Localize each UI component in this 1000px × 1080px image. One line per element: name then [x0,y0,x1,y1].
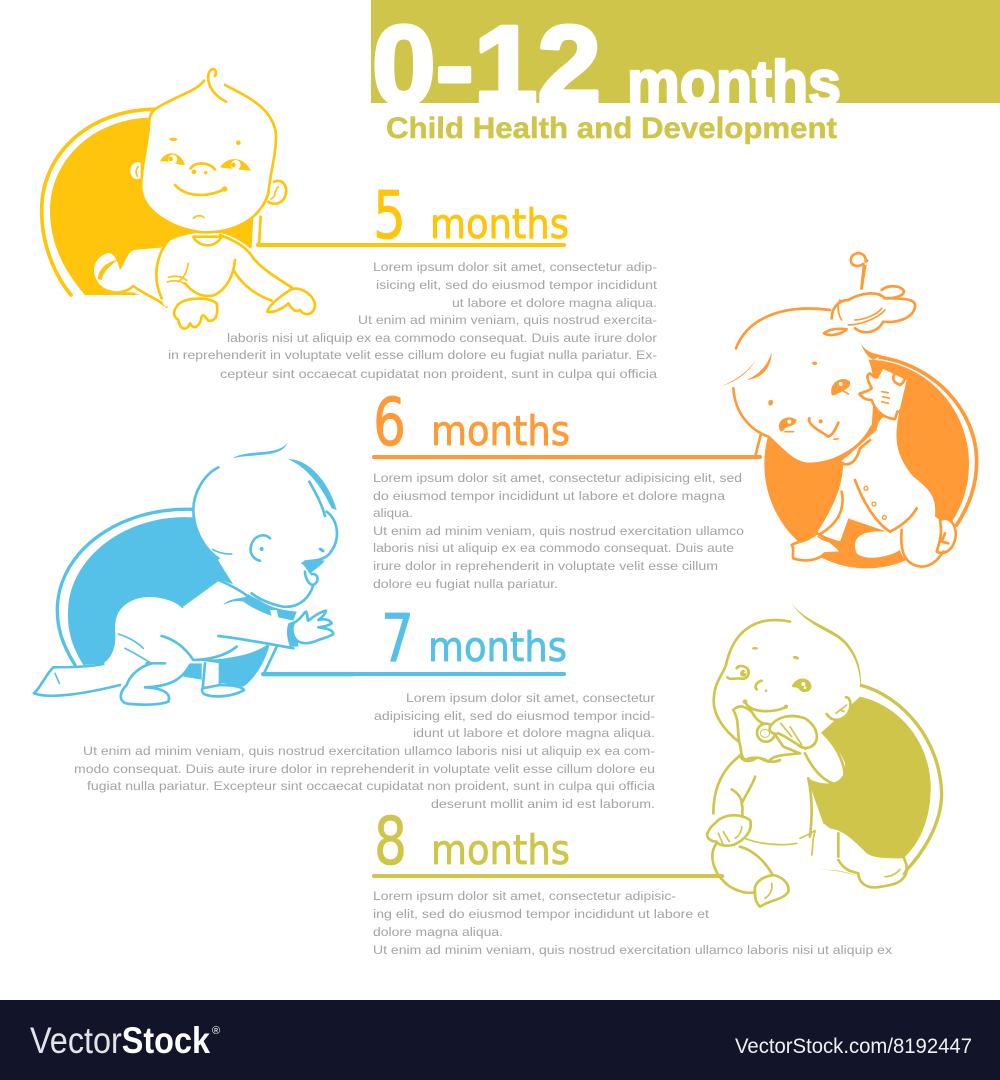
body text: ut labore et dolore magna aliqua. [452,296,657,310]
title: 0-12 months: months [627,49,841,118]
body text: do eiusmod tempor incididunt ut labore et dolore magna [373,489,725,503]
body text: modo consequat. Duis aute irure dolor in reprehenderit in voluptate velit esse cillum dolore eu [74,762,655,776]
body text: adipisicing elit, sed do eiusmod tempor incid- [374,709,655,723]
heading: 8 months [374,803,570,880]
body text: laboris nisi ut aliquip ex ea commodo consequat. Duis aute [373,541,734,555]
heading: 7 months [381,600,567,677]
body text: Ut enim ad minim veniam, quis nostrud exercitation ullamco laboris nisi ut aliquip ex ea com- [83,744,655,758]
body text: in reprehenderit in voluptate velit esse cillum dolore eu fugiat nulla pariatur. Ex- [168,348,657,362]
body text [373,471,744,591]
heading: 8 months: 8 [374,803,407,880]
body text: Ut enim ad minim veniam, quis nostrud exercitation ullamco laboris nisi ut aliquip ex [373,943,893,957]
body text: cepteur sint occaecat cupidatat non proident, sunt in culpa qui officia [220,367,657,381]
connector line [263,672,564,676]
registered mark: ® [212,1025,220,1037]
body text: dolore eu fugiat nulla pariatur. [373,577,558,591]
footer image id: VectorStock.com/8192447 [735,1035,972,1058]
body text: deserunt mollit anim id est laborum. [431,797,655,811]
body text [373,889,893,957]
section: 5 months [168,177,658,381]
subtitle: Child Health and Development [386,112,837,145]
body text: Lorem ipsum dolor sit amet, consectetur adipisic- [373,889,676,903]
heading: 6 months: 6 [373,384,406,461]
title: 0-12 months [372,3,841,128]
footer bar [0,1000,1000,1080]
heading: 8 months: months [431,826,570,874]
section: 6 months [373,384,760,591]
body text: dolore magna aliqua. [373,925,503,939]
heading: 6 months [373,384,570,461]
section: 8 months [373,803,893,957]
section: 7 months [74,600,655,811]
title: 0-12 months: 0-12 [372,3,601,128]
body text: Lorem ipsum dolor sit amet, consectetur [406,691,655,705]
heading: 7 months: 7 [381,600,414,677]
baby illustration: 5 months, yellow [42,69,315,329]
body text: isicing elit, sed do eiusmod tempor incididunt [376,278,658,292]
body text [168,260,658,381]
baby illustration: 6 months, orange [700,253,977,568]
connector line [374,874,722,878]
body text: fugiat nulla pariatur. Excepteur sint occaecat cupidatat non proident, sunt in culpa qui officia [87,779,655,793]
body text: Lorem ipsum dolor sit amet, consectetur adip- [373,260,657,274]
connector line [374,455,760,459]
footer logo: VectorStock [30,1020,210,1061]
body text: idunt ut labore et dolore magna aliqua. [413,726,655,740]
heading: 5 months: months [430,200,569,248]
heading: 5 months [373,177,569,254]
body text [74,691,655,811]
body text: irure dolor in reprehenderit in voluptate velit esse cillum [373,559,718,573]
heading: 7 months: months [428,623,567,671]
body text: aliqua. [373,506,413,520]
body text: Ut enim ad minim veniam, quis nostrud exercitation ullamco [373,524,744,538]
body text: laboris nisi ut aliquip ex ea commodo consequat. Duis aute irure dolor [227,331,657,345]
body text: ing elit, sed do eiusmod tempor incididunt ut labore et [373,907,710,921]
body text: Ut enim ad minim veniam, quis nostrud exercita- [358,313,657,327]
baby illustration: 8 months, olive [690,600,942,907]
body text: Lorem ipsum dolor sit amet, consectetur adipisicing elit, sed [373,471,742,485]
connector line [258,243,564,247]
header: title band and headings [371,0,1000,145]
baby illustration: 7 months, blue [34,443,353,705]
heading: 5 months: 5 [373,177,406,254]
heading: 6 months: months [431,407,570,455]
